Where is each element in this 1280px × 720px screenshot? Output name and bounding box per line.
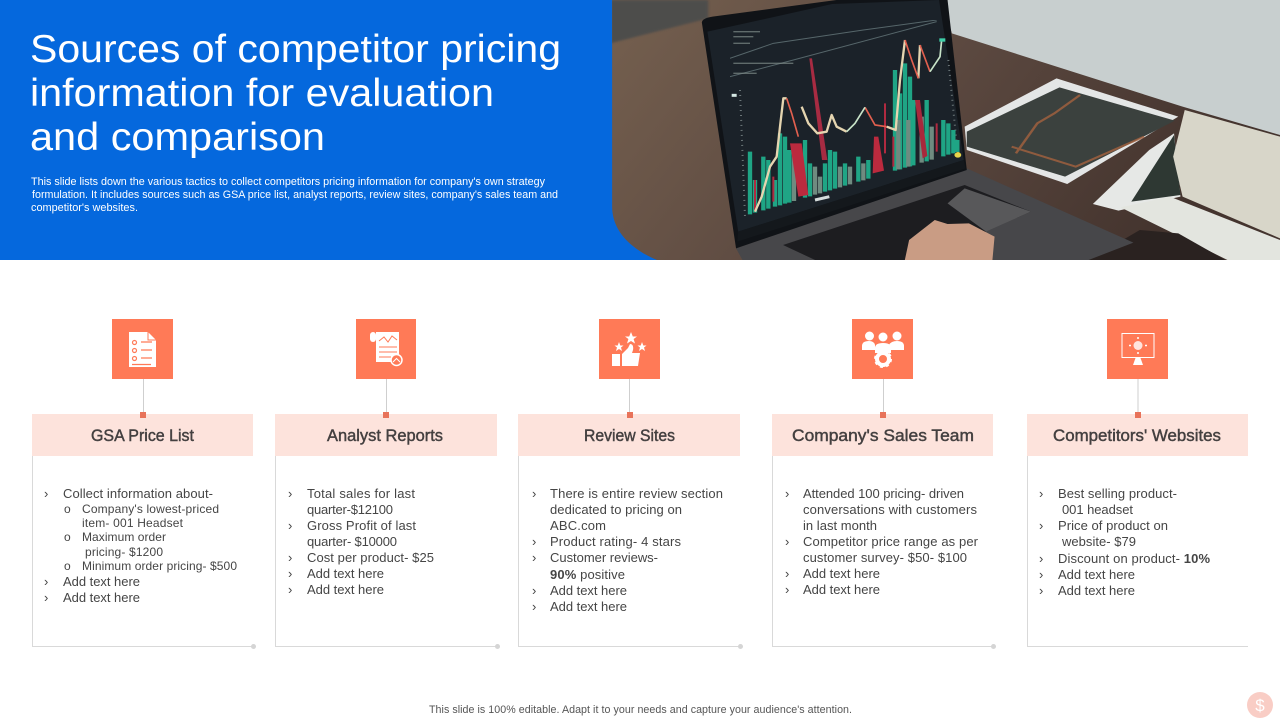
title: Sources of competitor pricing <box>30 28 561 71</box>
text block: Competitors' Websites <box>1039 486 1210 598</box>
chart on laptop screen <box>730 20 960 216</box>
panel: GSA Price List <box>32 319 256 649</box>
text block: GSA Price List: › <box>44 574 48 589</box>
panel: Review Sites <box>518 319 743 649</box>
text block: Analyst Reports: quarter-$12100 <box>307 502 393 517</box>
text block: Review Sites <box>532 486 723 614</box>
text block: Competitors' Websites: Add text here <box>1058 567 1135 582</box>
header panel: blue background <box>0 0 665 260</box>
icon: checklist document <box>112 319 173 379</box>
heading: GSA Price List: GSA Price List <box>91 426 194 445</box>
text block: Competitors' Websites: › <box>1039 551 1043 566</box>
heading: Company's Sales Team <box>772 412 993 456</box>
text block: GSA Price List: Collect information about- <box>63 486 213 501</box>
description text: competitor's websites. <box>31 202 138 214</box>
header photo: laptop with trading chart <box>612 0 1280 260</box>
panel: Company's Sales Team <box>772 319 996 649</box>
text block: Competitors' Websites: website- $79 <box>1061 534 1136 549</box>
text block: Company's Sales Team: › <box>785 582 789 597</box>
text block: GSA Price List: o <box>64 559 71 573</box>
description text: This slide lists down the various tactics to collect competitors pricing information for company's own strategy <box>31 176 546 188</box>
text block: Company's Sales Team: Attended 100 pricing- driven <box>803 486 964 501</box>
text block: Analyst Reports: Cost per product- $25 <box>307 550 434 565</box>
title: information for evaluation <box>30 72 494 115</box>
heading: Company's Sales Team: Company's Sales Team <box>792 426 974 445</box>
text block: Review Sites: There is entire review section <box>550 486 723 501</box>
text block: Review Sites: › <box>532 583 536 598</box>
icon: team with gear <box>852 319 913 379</box>
text block: Competitors' Websites: Best selling product- <box>1058 486 1177 501</box>
title <box>30 28 561 159</box>
text block: Company's Sales Team: customer survey- $50- $100 <box>803 550 967 565</box>
text block: Review Sites: › <box>532 486 536 501</box>
text block: GSA Price List: item- 001 Headset <box>82 516 184 530</box>
icon: watermark dollar: $ <box>1255 696 1265 715</box>
heading: Analyst Reports: Analyst Reports <box>327 426 443 445</box>
text block: GSA Price List: pricing- $1200 <box>85 545 163 559</box>
text block: Competitors' Websites: Discount on product- 10% <box>1058 551 1210 566</box>
icon: thumbs up with stars <box>599 319 660 379</box>
text block: Analyst Reports: › <box>288 486 292 501</box>
text block: Analyst Reports: › <box>288 550 292 565</box>
text block: Review Sites: dedicated to pricing on <box>550 502 682 517</box>
text block: Company's Sales Team: Competitor price range as per <box>803 534 979 549</box>
footer note: This slide is 100% editable. Adapt it to your needs and capture your audience's attention. <box>429 704 852 716</box>
text block: GSA Price List: › <box>44 590 48 605</box>
text block: Company's Sales Team: Add text here <box>803 582 880 597</box>
text block: GSA Price List: Add text here <box>63 574 140 589</box>
text block: Analyst Reports: › <box>288 518 292 533</box>
text block: Company's Sales Team: › <box>785 534 789 549</box>
text block: Analyst Reports: quarter- $10000 <box>307 534 397 549</box>
text block: Review Sites: › <box>532 534 536 549</box>
text block: Competitors' Websites: › <box>1039 486 1043 501</box>
text block: Analyst Reports: › <box>288 582 292 597</box>
text block: Competitors' Websites: Price of product on <box>1058 518 1168 533</box>
icon: watermark dollar <box>1247 692 1273 718</box>
text block: Review Sites: ABC.com <box>550 518 606 533</box>
title: and comparison <box>30 116 325 159</box>
text block: Review Sites: Product rating- 4 stars <box>550 534 682 549</box>
text block: Analyst Reports <box>288 486 434 597</box>
text block: GSA Price List: Minimum order pricing- $500 <box>82 559 237 573</box>
text block: GSA Price List <box>44 486 237 605</box>
panel: Competitors' Websites <box>1027 319 1248 646</box>
text block: Analyst Reports: Total sales for last <box>307 486 415 501</box>
text block: Company's Sales Team <box>785 486 979 597</box>
text block: Competitors' Websites: › <box>1039 583 1043 598</box>
text block: GSA Price List: o <box>64 502 71 516</box>
heading: Competitors' Websites <box>1027 412 1248 456</box>
description text: formulation. It includes sources such as GSA price list, analyst reports, review sites, company's sales team and <box>32 189 558 201</box>
text block: Company's Sales Team: › <box>785 486 789 501</box>
description text <box>31 176 558 214</box>
text block: Competitors' Websites: 001 headset <box>1062 502 1133 517</box>
icon: report scroll with chart <box>356 319 416 379</box>
text block: Review Sites: › <box>532 550 536 565</box>
text block: Review Sites: Customer reviews- <box>550 550 658 565</box>
text block: Review Sites: 90% positive <box>550 567 625 582</box>
heading: Review Sites <box>518 412 740 456</box>
text block: Analyst Reports: Add text here <box>307 582 384 597</box>
text block: Competitors' Websites: › <box>1039 567 1043 582</box>
text block: GSA Price List: o <box>64 530 71 544</box>
text block: Analyst Reports: Gross Profit of last <box>307 518 416 533</box>
text block: GSA Price List: Maximum order <box>82 530 166 544</box>
text block: Company's Sales Team: in last month <box>803 518 877 533</box>
heading: Review Sites: Review Sites <box>584 426 675 445</box>
heading: Analyst Reports <box>275 412 497 456</box>
text block: Competitors' Websites: › <box>1039 518 1043 533</box>
heading: GSA Price List <box>32 412 253 456</box>
text block: GSA Price List: Add text here <box>63 590 140 605</box>
text block: GSA Price List: › <box>44 486 48 501</box>
text block: Analyst Reports: › <box>288 566 292 581</box>
text block: Review Sites: Add text here <box>550 599 627 614</box>
text block: Company's Sales Team: Add text here <box>803 566 880 581</box>
text block: Company's Sales Team: conversations with customers <box>803 502 978 517</box>
panel: Analyst Reports <box>275 319 500 649</box>
text block: Review Sites: › <box>532 599 536 614</box>
icon: monitor with globe <box>1107 319 1168 379</box>
text block: Competitors' Websites: Add text here <box>1058 583 1135 598</box>
heading: Competitors' Websites: Competitors' Websites <box>1053 426 1221 445</box>
text block: GSA Price List: Company's lowest-priced <box>82 502 219 516</box>
text block: Analyst Reports: Add text here <box>307 566 384 581</box>
text block: Company's Sales Team: › <box>785 566 789 581</box>
text block: Review Sites: Add text here <box>550 583 627 598</box>
